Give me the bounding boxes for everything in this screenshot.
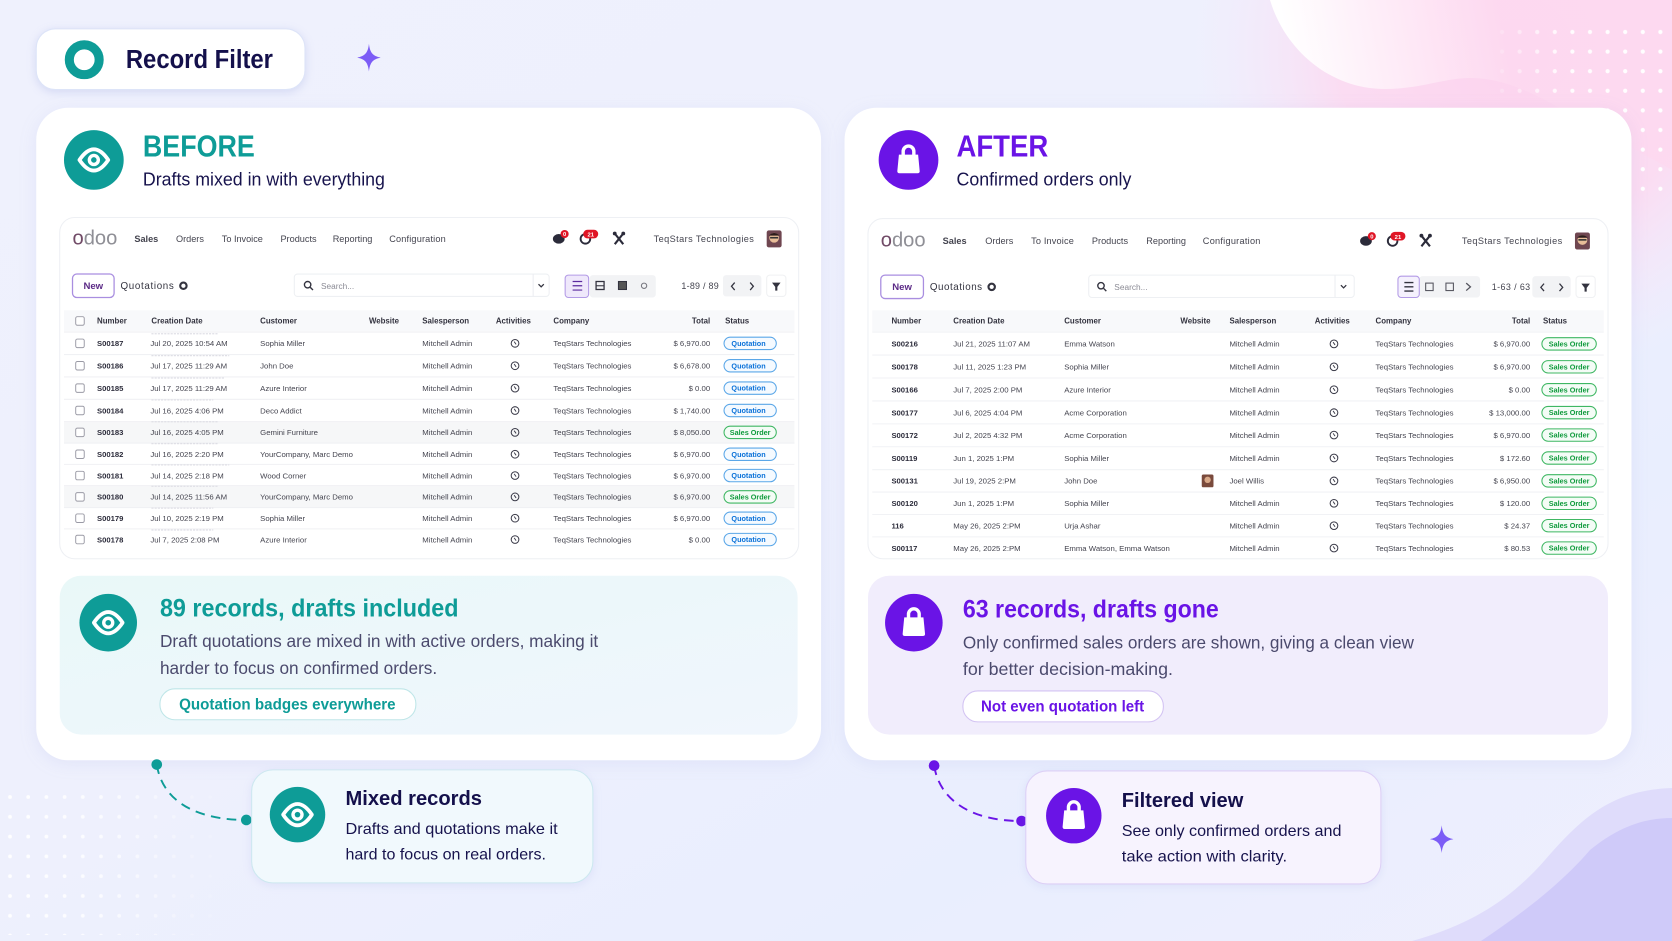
row: S00179 <box>76 512 776 524</box>
row: S00178: Azure Interior <box>260 535 307 544</box>
nav bar: Sales <box>134 234 158 244</box>
row: S00182: Mitchell Admin <box>422 450 472 459</box>
row: S00172: S00172 <box>891 431 918 440</box>
row: S00177: $ 13,000.00 <box>1489 408 1531 417</box>
toolbar: 1-89 / 89 <box>681 281 719 291</box>
row: S00178 <box>76 533 776 546</box>
row: 116: TeqStars Technologies <box>1376 521 1454 530</box>
panel: after <box>845 108 1631 760</box>
nav bar: TeqStars Technologies <box>1462 236 1563 246</box>
row: S00184: Deco Addict <box>260 406 302 415</box>
row: S00166 <box>891 384 1596 396</box>
nav bar: TeqStars Technologies <box>654 234 754 244</box>
row: S00185 <box>76 382 776 394</box>
nav bar: Configuration <box>389 234 446 244</box>
icon: activity: 21 <box>1395 235 1402 241</box>
row: S00166: Azure Interior <box>1064 386 1111 395</box>
row: S00181 <box>76 469 776 482</box>
subheading: after: Confirmed orders only <box>956 170 1132 190</box>
row: S00185: $ 0.00 <box>689 384 711 393</box>
table header row: Creation Date <box>953 317 1005 326</box>
row: S00178: Mitchell Admin <box>422 535 472 544</box>
row: S00181: TeqStars Technologies <box>553 471 632 480</box>
row: S00119: TeqStars Technologies <box>1376 454 1454 463</box>
stat body <box>963 632 1414 679</box>
icon: stat eye <box>79 594 137 652</box>
row: S00182: TeqStars Technologies <box>553 450 632 459</box>
callout title: Mixed records <box>345 788 482 810</box>
icon: before eye <box>64 130 124 190</box>
row: S00178: S00178 <box>891 363 919 372</box>
row: S00119: $ 172.60 <box>1500 454 1531 463</box>
row: S00183: Mitchell Admin <box>422 428 472 437</box>
row: S00178: Mitchell Admin <box>1229 363 1280 372</box>
callout text: See only confirmed orders and <box>1122 823 1341 840</box>
avatar <box>1575 232 1590 250</box>
row: S00181: S00181 <box>97 471 124 480</box>
row: S00131 <box>891 474 1596 487</box>
table header row: Number <box>97 317 127 326</box>
stat panel: 63 records <box>868 576 1608 735</box>
row: S00180 <box>76 491 776 503</box>
row: S00172: Jul 2, 2025 4:32 PM <box>953 431 1022 440</box>
row: S00166: Jul 7, 2025 2:00 PM <box>953 386 1022 395</box>
stat panel: 89 records <box>60 576 798 735</box>
row: S00184: $ 1,740.00 <box>673 406 711 415</box>
row: S00216: S00216 <box>891 340 918 349</box>
row: S00172 <box>891 429 1596 441</box>
row: S00120 <box>891 497 1596 509</box>
row: S00180: S00180 <box>97 493 123 502</box>
row: S00183: Jul 16, 2025 4:05 PM <box>150 428 224 437</box>
row: 116: 116 <box>891 521 904 530</box>
icon: sparkle bottom <box>1430 825 1453 853</box>
table header row: Website <box>369 317 400 326</box>
row: S00187: Jul 20, 2025 10:54 AM <box>150 339 228 348</box>
nav bar: Orders <box>985 236 1014 246</box>
toolbar: Quotations <box>930 282 982 293</box>
table header row: Creation Date <box>151 317 203 326</box>
row: S00131: TeqStars Technologies <box>1376 477 1454 486</box>
row: S00177: TeqStars Technologies <box>1376 408 1454 417</box>
row: S00178 <box>891 361 1596 373</box>
row: S00181: Wood Corner <box>260 471 307 480</box>
row: S00120: TeqStars Technologies <box>1376 499 1454 508</box>
row: S00117: TeqStars Technologies <box>1376 544 1454 553</box>
row: S00185: S00185 <box>97 384 124 393</box>
table header row <box>872 310 1604 537</box>
row: S00185: Quotation <box>731 384 766 393</box>
row: S00179: Jul 10, 2025 2:19 PM <box>150 514 224 523</box>
row: S00179: $ 6,970.00 <box>673 514 711 523</box>
icon: after lock <box>879 130 938 190</box>
callout title: Filtered view <box>1122 790 1244 812</box>
row: S00183: TeqStars Technologies <box>553 428 632 437</box>
nav bar <box>73 228 782 250</box>
row: S00182: S00182 <box>97 450 123 459</box>
toolbar: Quotations <box>120 281 174 292</box>
icon: chat <box>1360 232 1376 246</box>
row: S00186 <box>76 360 776 372</box>
row: S00184: Jul 16, 2025 4:06 PM <box>150 406 224 415</box>
row: S00177: Mitchell Admin <box>1229 408 1280 417</box>
row: S00180: Jul 14, 2025 11:56 AM <box>150 493 227 502</box>
row: S00186: TeqStars Technologies <box>553 362 632 371</box>
heading: AFTER: AFTER <box>956 129 1048 164</box>
row: S00182: Jul 16, 2025 2:20 PM <box>150 450 224 459</box>
row: S00131: S00131 <box>891 477 919 486</box>
table header row <box>64 310 794 332</box>
heading: BEFORE: BEFORE <box>143 129 255 164</box>
row: S00181: $ 6,970.00 <box>673 471 711 480</box>
row: S00177: Sales Order <box>1549 408 1590 417</box>
row: S00181: Quotation <box>731 471 766 480</box>
row: S00186: John Doe <box>260 362 293 371</box>
row: S00180: TeqStars Technologies <box>553 493 632 502</box>
tag: Not even quotation left: Not even quotation left <box>981 699 1145 716</box>
row: 116 <box>891 519 1596 532</box>
row: S00172: $ 6,970.00 <box>1493 431 1531 440</box>
row: S00119 <box>891 452 1596 464</box>
table header row: Customer <box>1064 317 1101 326</box>
row: S00117: May 26, 2025 2:PM <box>953 544 1021 553</box>
row: S00179: Quotation <box>731 514 766 523</box>
connector: before to callout <box>151 759 252 825</box>
stat body <box>160 631 598 678</box>
row: S00216: Sales Order <box>1549 339 1590 348</box>
row: S00187: S00187 <box>97 339 123 348</box>
nav bar: Sales <box>943 236 967 246</box>
icon: sparkle top <box>357 44 381 71</box>
stat body: harder to focus on confirmed orders. <box>160 658 437 678</box>
row: S00120: Jun 1, 2025 1:PM <box>953 499 1014 508</box>
nav bar <box>881 229 1590 251</box>
row: S00183: S00183 <box>97 428 123 437</box>
row: S00131: John Doe <box>1064 477 1097 486</box>
row: S00178: $ 0.00 <box>689 535 711 544</box>
toolbar <box>73 274 786 297</box>
row: S00216: TeqStars Technologies <box>1376 340 1454 349</box>
nav bar: To Invoice <box>222 234 263 244</box>
toolbar <box>881 275 1595 299</box>
nav bar: Reporting <box>1146 236 1186 246</box>
row: S00178: S00178 <box>97 535 124 544</box>
row: S00178: TeqStars Technologies <box>553 535 632 544</box>
row: S00166: Sales Order <box>1549 385 1590 394</box>
row: S00185: Azure Interior <box>260 384 307 393</box>
row: S00216: Mitchell Admin <box>1229 340 1280 349</box>
row: S00117: Emma Watson, Emma Watson <box>1064 544 1170 553</box>
row: S00186: Quotation <box>731 361 766 370</box>
nav bar: odoo <box>881 229 926 251</box>
row: S00178: $ 6,970.00 <box>1493 363 1531 372</box>
row: S00183: Gemini Furniture <box>260 428 318 437</box>
row: S00172: Sales Order <box>1549 431 1590 440</box>
toolbar: New <box>83 281 104 292</box>
toolbar: New <box>892 282 913 293</box>
row: 116: Sales Order <box>1549 521 1590 530</box>
nav bar: Orders <box>176 234 204 244</box>
tag: Quotation badges everywhere <box>160 689 416 720</box>
row: S00120: Sales Order <box>1549 499 1590 508</box>
row: S00187: Mitchell Admin <box>422 339 472 348</box>
row: S00172: Mitchell Admin <box>1229 431 1280 440</box>
row: S00183: $ 8,050.00 <box>673 428 711 437</box>
row: S00177: Jul 6, 2025 4:04 PM <box>953 408 1022 417</box>
row: S00178: Sales Order <box>1549 362 1590 371</box>
row: S00216: Jul 21, 2025 11:07 AM <box>953 340 1030 349</box>
row: S00183 <box>76 426 776 439</box>
row: S00178: Jul 11, 2025 1:23 PM <box>953 363 1026 372</box>
row: S00184: Mitchell Admin <box>422 406 472 415</box>
row: S00216: $ 6,970.00 <box>1493 340 1531 349</box>
icon: activity <box>581 230 598 244</box>
table header row: Website <box>1180 317 1211 326</box>
row: S00178: Quotation <box>731 535 766 544</box>
row: S00179: S00179 <box>97 514 123 523</box>
tag: Not even quotation left <box>963 691 1163 722</box>
row: S00166: $ 0.00 <box>1509 386 1531 395</box>
row: S00117: $ 80.53 <box>1504 544 1530 553</box>
row: S00182: Quotation <box>731 450 766 459</box>
table header row: Salesperson <box>1229 317 1276 326</box>
row: 116: May 26, 2025 2:PM <box>953 521 1021 530</box>
row: S00180: YourCompany, Marc Demo <box>260 493 353 502</box>
nav bar: Configuration <box>1203 236 1260 246</box>
table header row: Salesperson <box>422 317 469 326</box>
stat body: Draft quotations are mixed in with active orders, making it <box>160 631 598 651</box>
row: S00166: S00166 <box>891 386 918 395</box>
row: S00179: Sophia Miller <box>260 514 305 523</box>
row: S00180: $ 6,970.00 <box>673 493 711 502</box>
table header row: Total <box>692 317 710 326</box>
icon: callout eye <box>270 787 325 842</box>
row: S00187: TeqStars Technologies <box>553 339 632 348</box>
avatar <box>767 230 782 247</box>
screenshot: after table <box>868 219 1608 559</box>
row: S00172: Acme Corporation <box>1064 431 1127 440</box>
icon: chat <box>553 230 569 244</box>
row: S00177: Acme Corporation <box>1064 408 1127 417</box>
callout text: Drafts and quotations make it <box>345 821 558 838</box>
nav bar: Products <box>280 234 317 244</box>
row: S00216: Emma Watson <box>1064 340 1115 349</box>
title: Record Filter <box>126 46 273 74</box>
row: S00181: Mitchell Admin <box>422 471 472 480</box>
nav bar: odoo <box>73 228 117 250</box>
row: S00184: S00184 <box>97 406 124 415</box>
shaded sales-order rows <box>64 332 794 530</box>
stat heading: 89 records, drafts included <box>160 595 459 622</box>
row: S00117: Mitchell Admin <box>1229 544 1280 553</box>
row: S00120: Mitchell Admin <box>1229 499 1280 508</box>
row: S00166: Mitchell Admin <box>1229 386 1280 395</box>
row: S00117: S00117 <box>891 544 917 553</box>
toolbar: 1-63 / 63 <box>1492 282 1530 292</box>
callout text: hard to focus on real orders. <box>345 846 546 863</box>
row: S00184 <box>76 404 776 417</box>
toolbar: Search... <box>321 281 354 291</box>
stat heading: 63 records, drafts gone <box>963 596 1219 623</box>
row: S00181: Jul 14, 2025 2:18 PM <box>150 471 224 480</box>
icon: chat: 0 <box>1370 234 1374 240</box>
callout text <box>345 821 558 863</box>
row: S00185: Jul 17, 2025 11:29 AM <box>150 384 227 393</box>
row: S00179: TeqStars Technologies <box>553 514 632 523</box>
callout text: take action with clarity. <box>1122 849 1287 866</box>
icon: activity <box>1388 232 1405 246</box>
row: S00184: Quotation <box>731 406 766 415</box>
table header row: Company <box>1376 317 1412 326</box>
row: 116: $ 24.37 <box>1504 521 1530 530</box>
nav bar: To Invoice <box>1031 236 1074 246</box>
toolbar: Search... <box>1114 282 1148 292</box>
row: S00186: S00186 <box>97 362 123 371</box>
icon: teal ring <box>69 45 99 75</box>
row: S00172: TeqStars Technologies <box>1376 431 1454 440</box>
icon: activity: 21 <box>587 233 595 239</box>
row: S00178: TeqStars Technologies <box>1376 363 1454 372</box>
callout: Mixed records <box>252 770 593 883</box>
row: S00177: S00177 <box>891 408 918 417</box>
row: 116: Mitchell Admin <box>1229 521 1280 530</box>
row: S00177 <box>891 406 1596 419</box>
row: S00131: $ 6,950.00 <box>1493 477 1531 486</box>
row: S00120: Sophia Miller <box>1064 499 1109 508</box>
row: 116: Urja Ashar <box>1064 521 1101 530</box>
row: S00187 <box>76 337 776 350</box>
row: S00187: Sophia Miller <box>260 339 305 348</box>
row: S00186: $ 6,678.00 <box>673 362 711 371</box>
row: S00185: TeqStars Technologies <box>553 384 632 393</box>
row: S00184: TeqStars Technologies <box>553 406 632 415</box>
table header row: Total <box>1512 317 1530 326</box>
nav bar: Products <box>1092 236 1128 246</box>
stat body: Only confirmed sales orders are shown, giving a clean view <box>963 632 1414 652</box>
row: S00119: S00119 <box>891 454 917 463</box>
row: S00119: Sales Order <box>1549 454 1590 463</box>
subheading: before: Drafts mixed in with everything <box>143 170 385 190</box>
row: S00182: YourCompany, Marc Demo <box>260 450 353 459</box>
icon: tools <box>613 232 625 244</box>
icon: chat: 0 <box>563 232 567 238</box>
table header row: Customer <box>260 317 297 326</box>
row: S00186: Jul 17, 2025 11:29 AM <box>150 362 227 371</box>
row: S00180: Sales Order <box>730 492 771 501</box>
callout: Filtered view <box>1026 771 1381 884</box>
row: S00187: Quotation <box>731 339 766 348</box>
table header row: Number <box>891 317 921 326</box>
row: S00186: Mitchell Admin <box>422 362 472 371</box>
row: S00183: Sales Order <box>730 428 771 437</box>
row: S00117: Sales Order <box>1549 544 1590 553</box>
row: S00180: Mitchell Admin <box>422 493 472 502</box>
row: S00182: $ 6,970.00 <box>673 450 711 459</box>
row: S00119: Jun 1, 2025 1:PM <box>953 454 1014 463</box>
row: S00178: Jul 7, 2025 2:08 PM <box>150 535 219 544</box>
row: S00216 <box>891 338 1596 350</box>
screenshot: before table <box>60 218 799 559</box>
icon: stat lock <box>885 594 943 652</box>
row: S00185: Mitchell Admin <box>422 384 472 393</box>
nav bar: Reporting <box>333 234 372 244</box>
row: S00131: Sales Order <box>1549 476 1590 485</box>
row: S00120: $ 120.00 <box>1500 499 1531 508</box>
row: S00119: Mitchell Admin <box>1229 454 1280 463</box>
row: S00166: TeqStars Technologies <box>1376 386 1454 395</box>
row: S00182 <box>76 448 776 460</box>
table header row: Status <box>725 317 750 326</box>
callout text <box>1122 823 1341 866</box>
stat body: for better decision-making. <box>963 659 1173 679</box>
table header row: Status <box>1543 317 1568 326</box>
table header row: Activities <box>496 317 531 326</box>
row: S00120: S00120 <box>891 499 918 508</box>
row: S00187: $ 6,970.00 <box>673 339 711 348</box>
row: S00131: Jul 19, 2025 2:PM <box>953 477 1016 486</box>
row: S00179: Mitchell Admin <box>422 514 472 523</box>
table header row: Company <box>553 317 590 326</box>
row: S00119: Sophia Miller <box>1064 454 1109 463</box>
row: S00131: Joel Willis <box>1229 477 1264 486</box>
row: S00178: Sophia Miller <box>1064 363 1109 372</box>
tag: Quotation badges everywhere: Quotation badges everywhere <box>179 697 396 714</box>
connector: after to callout <box>929 760 1027 826</box>
title pill: Record Filter <box>36 29 305 90</box>
row: S00117 <box>891 542 1596 554</box>
panel: before <box>36 108 821 760</box>
table header row: Activities <box>1315 317 1350 326</box>
icon: tools <box>1419 234 1432 246</box>
icon: callout lock <box>1046 788 1102 843</box>
